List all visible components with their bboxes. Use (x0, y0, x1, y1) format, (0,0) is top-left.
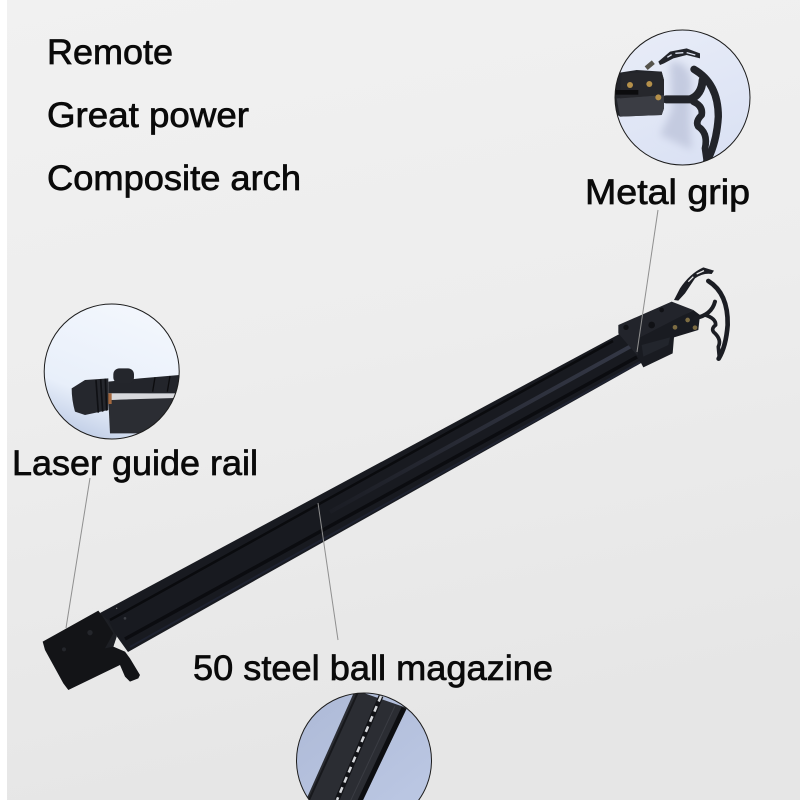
callout: laser guide rail (12, 300, 258, 483)
icon: laser detail (44, 304, 180, 440)
callout: steel ball magazine (193, 649, 553, 800)
label: 50 steel ball magazine: 50 steel ball magazine (193, 649, 553, 688)
rail body (100, 331, 650, 652)
grip bow (674, 267, 728, 359)
feature list (47, 33, 301, 198)
feature: great power: Great power (47, 96, 249, 135)
feature: composite arch: Composite arch (47, 159, 301, 198)
leader lines (66, 210, 658, 640)
grip mount block (618, 302, 700, 367)
label: metal grip: Metal grip (585, 173, 750, 212)
icon: metal grip detail (614, 30, 750, 166)
icon: magazine detail (290, 690, 435, 800)
feature: remote: Remote (47, 33, 173, 72)
end block (43, 608, 140, 690)
product: slingshot rail (43, 267, 728, 690)
label: laser guide rail: Laser guide rail (12, 444, 258, 483)
callout: metal grip (585, 25, 760, 212)
